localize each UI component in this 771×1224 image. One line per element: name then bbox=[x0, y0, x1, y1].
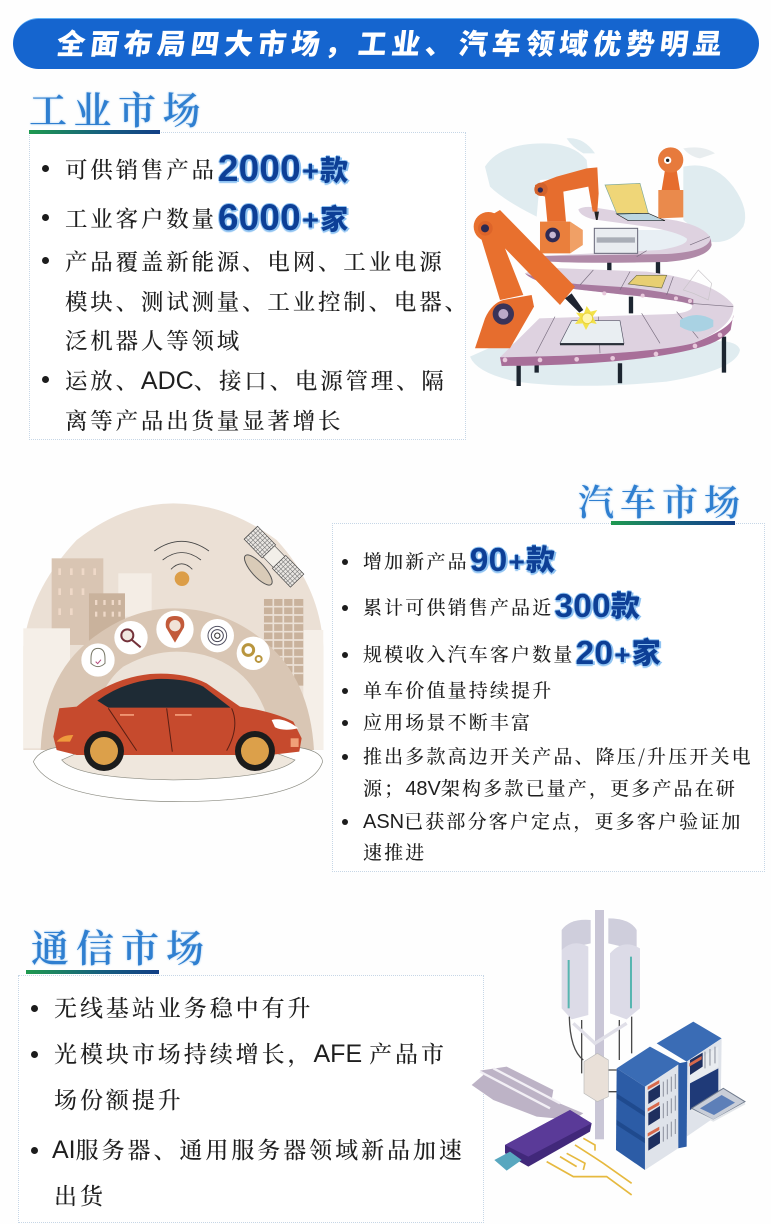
automotive bullet 6 line 2: 源；48V架构多款已量产，更多产品在研 bbox=[363, 774, 737, 801]
heading: automotive market: 汽车市场 bbox=[578, 475, 746, 526]
telecom bullet markers bbox=[31, 1005, 38, 1154]
industrial bullet 3 line 3: 泛机器人等领域 bbox=[65, 324, 242, 356]
automotive bullet 2: 累计可供销售产品近300款 bbox=[363, 588, 640, 625]
telecom bullet 2 line 2: 场份额提升 bbox=[54, 1082, 184, 1115]
industrial bullet markers bbox=[42, 165, 49, 383]
industrial bullet 3 line 2: 模块、测试测量、工业控制、电器、 bbox=[65, 285, 470, 317]
industrial bullet 4 line 2: 离等产品出货量显著增长 bbox=[65, 404, 343, 436]
heading underline: telecom bbox=[26, 970, 159, 974]
title banner: 全面布局四大市场，工业、汽车领域优势明显 bbox=[54, 22, 730, 63]
panel: telecom text bbox=[18, 975, 484, 1223]
heading: industrial market: 工业市场 bbox=[29, 80, 207, 135]
industrial bullet 4 line 1: 运放、ADC、接口、电源管理、隔 bbox=[65, 364, 447, 396]
heading: telecom market: 通信市场 bbox=[31, 918, 211, 973]
telecom bullet 3 line 1: AI服务器、通用服务器领域新品加速 bbox=[52, 1132, 465, 1165]
automotive bullet 4: 单车价值量持续提升 bbox=[363, 676, 553, 703]
automotive bullet 1: 增加新产品90+款 bbox=[363, 542, 555, 579]
heading underline: industrial bbox=[29, 130, 160, 134]
industrial bullet 3 line 1: 产品覆盖新能源、电网、工业电源 bbox=[65, 245, 445, 277]
automotive bullet 7 line 1: ASN已获部分客户定点，更多客户验证加 bbox=[363, 807, 743, 834]
heading underline: automotive bbox=[611, 521, 735, 525]
panel: automotive text bbox=[332, 523, 765, 872]
automotive bullet 5: 应用场景不断丰富 bbox=[363, 708, 532, 735]
telecom bullet 2 line 1: 光模块市场持续增长，AFE 产品市 bbox=[54, 1036, 447, 1069]
panel: industrial text bbox=[29, 132, 466, 440]
automotive bullet 7 line 2: 速推进 bbox=[363, 838, 426, 865]
automotive bullet markers bbox=[342, 559, 348, 825]
industrial bullet 2: 工业客户数量6000+家 bbox=[65, 197, 348, 238]
automotive bullet 6 line 1: 推出多款高边开关产品、降压/升压开关电 bbox=[363, 742, 753, 769]
telecom bullet 3 line 2: 出货 bbox=[54, 1178, 106, 1211]
telecom bullet 1: 无线基站业务稳中有升 bbox=[54, 990, 314, 1023]
automotive bullet 3: 规模收入汽车客户数量20+家 bbox=[363, 635, 661, 672]
industrial bullet 1: 可供销售产品2000+款 bbox=[65, 148, 348, 189]
